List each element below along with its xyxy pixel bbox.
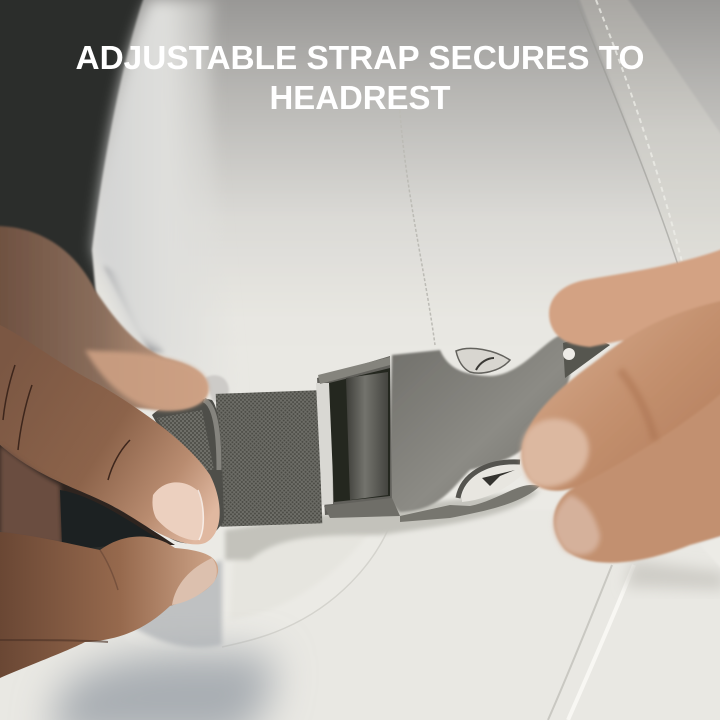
right strap end	[563, 335, 610, 378]
strap behind headrest edge	[104, 265, 165, 352]
strap and buckle	[152, 332, 610, 543]
middle finger	[521, 300, 720, 491]
lower finger	[0, 532, 218, 678]
buckle left frame	[317, 356, 392, 515]
shadow below buckle	[225, 490, 540, 560]
lower finger	[554, 390, 720, 563]
dark gap between fingers	[0, 445, 175, 545]
strap webbing	[216, 390, 322, 527]
pale tab by slider	[205, 375, 229, 405]
knuckle creases	[3, 365, 130, 480]
left plastic slider	[152, 399, 224, 543]
top slot	[456, 348, 510, 373]
seat panel seam	[548, 560, 720, 720]
headrest seam strip	[578, 0, 720, 265]
title	[76, 39, 644, 116]
buckle body	[388, 332, 578, 512]
thumb	[0, 325, 220, 544]
bottom slot	[462, 465, 522, 502]
left hand	[0, 226, 220, 678]
seat shadow	[50, 653, 273, 720]
headrest bottom edge	[222, 520, 392, 647]
back of hand, blurred index finger	[0, 226, 208, 410]
headrest	[92, 0, 720, 651]
headrest shaded left side	[94, 0, 240, 400]
right hand	[521, 248, 720, 572]
title: ADJUSTABLE STRAP SECURES TO	[76, 39, 644, 76]
thumbnail	[152, 482, 203, 540]
bottom headrest shadow	[130, 560, 222, 648]
upper finger	[549, 248, 720, 347]
title: HEADREST	[270, 79, 450, 116]
buckle lower rim	[400, 485, 540, 522]
dark car interior background	[0, 0, 170, 560]
center stitching	[399, 100, 435, 345]
middle fingernail	[521, 419, 589, 487]
